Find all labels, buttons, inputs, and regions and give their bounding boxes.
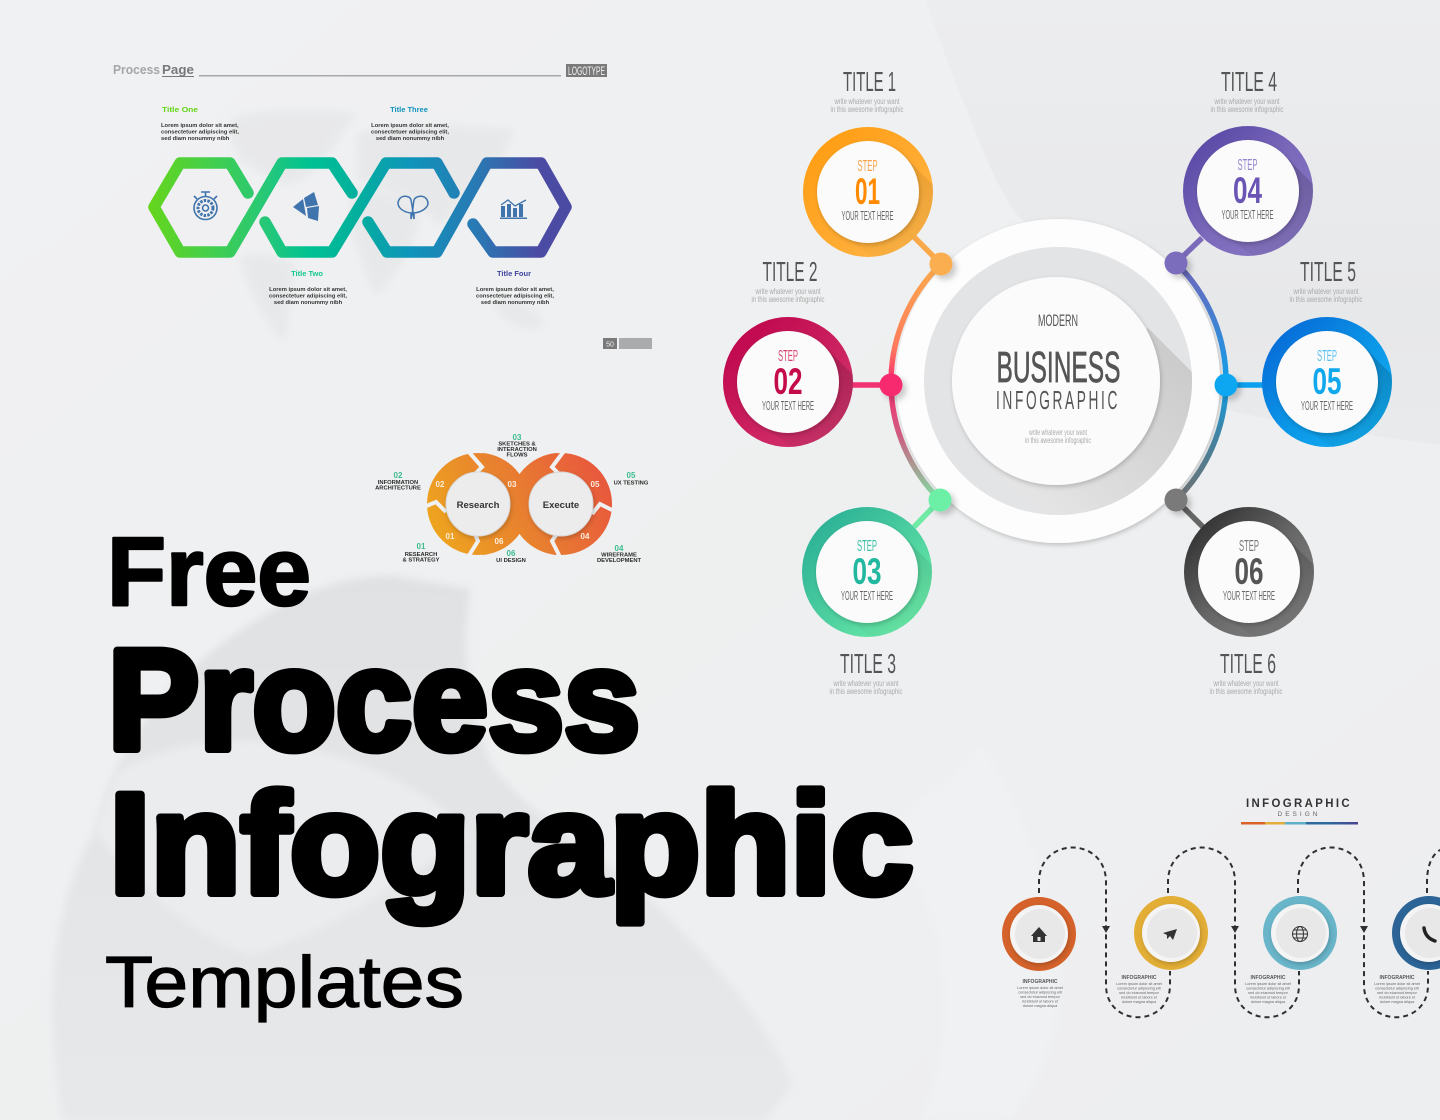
step 05 <box>1262 317 1392 447</box>
step 02: STEP <box>778 348 798 365</box>
ring numbers: 04 <box>581 532 590 541</box>
title 3 <box>830 648 903 696</box>
title three: Lorem ipsum dolor sit amet, <box>371 123 449 129</box>
title 2 <box>752 256 825 304</box>
centre text: in this awesome infographic <box>1025 436 1091 445</box>
title 5: in this awesome infographic <box>1290 294 1363 304</box>
step 04: YOUR TEXT HERE <box>1222 207 1274 222</box>
title 6: write whatever your want <box>1213 678 1279 688</box>
caption 2: INFOGRAPHIC <box>1122 975 1157 981</box>
caption 4: INFOGRAPHIC <box>1380 975 1415 981</box>
world map <box>230 110 545 343</box>
step 02: 02 <box>774 361 802 402</box>
ring numbers <box>436 480 600 546</box>
caption 4 <box>1374 975 1421 1004</box>
icon: bar chart <box>500 200 527 219</box>
title one: Title One <box>162 105 198 114</box>
logotype: LOGOTYPE <box>568 64 605 78</box>
title 1: in this awesome infographic <box>830 104 904 114</box>
caption 3: dolore magna aliqua <box>1251 1000 1286 1004</box>
caption 1: incididunt ut labore et <box>1022 1000 1059 1004</box>
step 04 <box>1183 126 1313 256</box>
step 03: YOUR TEXT HERE <box>841 588 893 603</box>
outer labels: 04 <box>615 544 624 553</box>
heading <box>1246 796 1352 818</box>
disc labels: Research <box>457 500 500 511</box>
caption 2: sed do eiusmod tempor <box>1119 991 1160 995</box>
word: Infographic: Infographic <box>110 765 914 924</box>
step 04: 04 <box>1233 170 1262 211</box>
outer labels: WIREFRAME <box>601 552 637 558</box>
icon: speech bubbles <box>293 192 319 221</box>
title 4 <box>1210 66 1284 114</box>
caption 3 <box>1245 975 1292 1004</box>
title 5: write whatever your want <box>1293 286 1359 296</box>
step 06: STEP <box>1239 538 1259 555</box>
heading: INFOGRAPHIC <box>1246 796 1352 810</box>
title three: sed diam nonummy nibh <box>376 136 445 142</box>
connectors <box>852 236 1264 527</box>
heading: process page: Page <box>162 62 194 77</box>
disc labels: Execute <box>543 500 579 511</box>
title one <box>161 105 239 142</box>
heading: DESIGN <box>1278 811 1320 818</box>
centre grey ring <box>924 247 1192 515</box>
outer labels: 01 <box>417 542 426 551</box>
title 3: write whatever your want <box>833 678 899 688</box>
caption 3: Lorem ipsum dolor sit amet <box>1245 982 1292 986</box>
centre text: BUSINESS <box>996 343 1120 392</box>
node dots <box>880 252 1238 512</box>
title four: Title Four <box>497 269 531 278</box>
caption 2: dolore magna aliqua <box>1122 1000 1157 1004</box>
outer labels: RESEARCH <box>405 552 437 558</box>
step 04: STEP <box>1238 157 1258 174</box>
caption 1 <box>1017 979 1064 1008</box>
step 02: YOUR TEXT HERE <box>762 398 814 413</box>
step 06 <box>1184 507 1314 637</box>
ring numbers: 06 <box>495 537 504 546</box>
word: Free: Free <box>107 517 311 626</box>
caption 2: consectetur adipiscing elit <box>1117 986 1162 990</box>
outer labels: ARCHITECTURE <box>375 486 421 492</box>
title two: Lorem ipsum dolor sit amet, <box>269 287 347 293</box>
title 2: in this awesome infographic <box>752 294 825 304</box>
caption 4: Lorem ipsum dolor sit amet <box>1374 982 1421 986</box>
caption 1: INFOGRAPHIC <box>1022 979 1058 985</box>
connecting arcs <box>891 263 1226 500</box>
word: Process: Process <box>108 621 640 780</box>
title two: sed diam nonummy nibh <box>274 300 343 306</box>
title one: sed diam nonummy nibh <box>161 136 230 142</box>
step 01 <box>803 127 933 257</box>
ring numbers: 03 <box>508 480 517 489</box>
title 3: in this awesome infographic <box>830 686 903 696</box>
long shadow <box>1084 328 1192 512</box>
icon: two heads <box>398 196 428 219</box>
title one: consectetuer adipiscing elit, <box>161 130 239 136</box>
outer labels: DEVELOPMENT <box>597 558 642 564</box>
step 01: 01 <box>855 171 880 212</box>
outer labels: INFORMATION <box>378 480 418 486</box>
step 01: YOUR TEXT HERE <box>842 208 894 223</box>
title 4: TITLE 4 <box>1221 66 1277 97</box>
main title <box>105 517 914 1023</box>
title 3: TITLE 3 <box>840 648 896 679</box>
outer labels: 05 <box>627 471 636 480</box>
panel: dashed timeline <box>1002 796 1440 1017</box>
outer labels: UI DESIGN <box>496 558 526 564</box>
title four: Lorem ipsum dolor sit amet, <box>476 287 554 293</box>
caption 2: Lorem ipsum dolor sit amet <box>1116 982 1163 986</box>
caption 3: incididunt ut labore et <box>1250 996 1287 1000</box>
step 03 <box>802 507 932 637</box>
step 05: STEP <box>1317 348 1337 365</box>
caption 1: consectetur adipiscing elit <box>1018 990 1063 994</box>
title 5: TITLE 5 <box>1300 256 1356 287</box>
title three: consectetuer adipiscing elit, <box>371 130 449 136</box>
circle: globe <box>1263 896 1337 970</box>
outer labels: UX TESTING <box>614 480 649 486</box>
panel: business infographic radial <box>723 66 1433 696</box>
disc labels <box>457 500 579 511</box>
centre text: INFOGRAPHIC <box>996 385 1120 415</box>
caption 3: INFOGRAPHIC <box>1250 975 1286 981</box>
circle: home <box>1002 897 1076 971</box>
caption 1: Lorem ipsum dolor sit amet <box>1017 986 1064 990</box>
title two <box>269 269 347 306</box>
caption 1: dolore magna aliqua <box>1023 1004 1058 1008</box>
title three: Title Three <box>390 105 428 114</box>
outer labels: INTERACTION <box>497 447 537 453</box>
step 06: 06 <box>1234 551 1264 592</box>
outer labels: SKETCHES & <box>498 442 536 448</box>
title 6 <box>1210 648 1283 696</box>
centre text <box>996 311 1120 445</box>
title 2: write whatever your want <box>755 286 821 296</box>
caption 1: sed do eiusmod tempor <box>1020 995 1061 999</box>
caption 3: sed do eiusmod tempor <box>1248 991 1289 995</box>
caption 4: dolore magna aliqua <box>1380 1000 1415 1004</box>
centre text: MODERN <box>1038 311 1078 330</box>
outer labels <box>375 433 649 564</box>
title four: consectetuer adipiscing elit, <box>476 294 554 300</box>
ring numbers: 02 <box>436 480 445 489</box>
title 1 <box>830 66 904 114</box>
title four: sed diam nonummy nibh <box>481 300 550 306</box>
caption 2: incididunt ut labore et <box>1121 996 1158 1000</box>
outer labels: 02 <box>394 471 403 480</box>
arrows <box>1102 926 1368 933</box>
title two: Title Two <box>291 269 323 278</box>
title 6: in this awesome infographic <box>1210 686 1283 696</box>
centre text: write whatever your want <box>1028 428 1088 437</box>
segment gaps <box>424 451 612 557</box>
icon: stopwatch gear <box>194 192 217 220</box>
title 4: write whatever your want <box>1214 96 1280 106</box>
ring numbers: 01 <box>446 532 455 541</box>
title 2: TITLE 2 <box>762 256 818 287</box>
title two: consectetuer adipiscing elit, <box>269 294 347 300</box>
caption 3: consectetur adipiscing elit <box>1246 986 1291 990</box>
outer labels: FLOWS <box>507 452 528 458</box>
dashed path <box>1039 848 1440 1017</box>
title 1: TITLE 1 <box>843 66 896 97</box>
word: Templates: Templates <box>105 943 464 1023</box>
circle: paper plane <box>1134 896 1208 970</box>
title 1: write whatever your want <box>834 96 900 106</box>
caption 4: incididunt ut labore et <box>1379 996 1416 1000</box>
centre outer ring <box>896 219 1220 543</box>
panel: infinity process <box>375 433 649 564</box>
heading: process page <box>113 62 561 77</box>
outer labels: 06 <box>507 549 516 558</box>
step 05: YOUR TEXT HERE <box>1301 398 1353 413</box>
step 05: 05 <box>1312 361 1342 402</box>
title 6: TITLE 6 <box>1220 648 1276 679</box>
step 01: STEP <box>858 158 878 175</box>
step 06: YOUR TEXT HERE <box>1223 588 1275 603</box>
outer labels: 03 <box>513 433 522 442</box>
page number <box>603 338 652 349</box>
logotype <box>566 64 607 78</box>
page number: 50 <box>606 342 614 348</box>
rainbow bar <box>1241 822 1358 824</box>
step 02 <box>723 317 853 447</box>
infinity ring <box>436 462 602 546</box>
title four <box>476 269 554 306</box>
title 4: in this awesome infographic <box>1210 104 1284 114</box>
title 5 <box>1290 256 1363 304</box>
step 03: 03 <box>852 551 882 592</box>
inner discs <box>446 472 593 536</box>
centre disc <box>952 277 1160 485</box>
ring numbers: 05 <box>591 480 600 489</box>
heading: process page: Process <box>113 62 160 77</box>
hexagon chain <box>154 163 566 252</box>
title one: Lorem ipsum dolor sit amet, <box>161 123 239 129</box>
caption 2 <box>1116 975 1163 1004</box>
title three <box>371 105 449 142</box>
outer labels: & STRATEGY <box>403 558 440 564</box>
caption 4: consectetur adipiscing elit <box>1375 986 1420 990</box>
step 03: STEP <box>857 538 877 555</box>
circle: phone <box>1392 896 1440 970</box>
panel: hexagon process <box>113 62 652 349</box>
caption 4: sed do eiusmod tempor <box>1377 991 1418 995</box>
